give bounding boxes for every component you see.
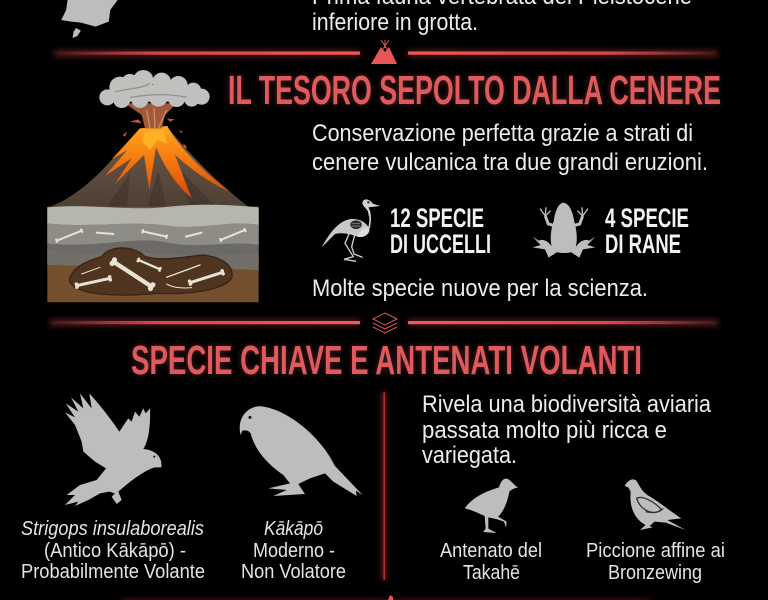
bone pocket <box>69 248 232 295</box>
pocket bones <box>77 260 223 288</box>
text: biodiversita: Rivela una biodiversità aviaria <box>422 391 711 418</box>
caption: piccione: Piccione affine ai <box>586 540 725 562</box>
strata <box>47 207 259 302</box>
icon: small volcano <box>371 40 397 64</box>
caption: kakapo: Kākāpō <box>264 518 323 540</box>
text: biodiversita <box>422 391 711 469</box>
text: biodiversita: variegata. <box>422 442 517 469</box>
lava flows <box>105 126 230 198</box>
icon: island map silhouette <box>61 0 118 38</box>
divider: layers <box>48 313 720 333</box>
stat: 12 specie di uccelli: 12 SPECIE <box>390 203 484 233</box>
text: nuove specie: Molte specie nuove per la scienza. <box>312 275 648 302</box>
vertical divider <box>381 392 387 580</box>
text: intro fauna: inferiore in grotta. <box>312 9 478 36</box>
caption: strigops: Strigops insulaborealis <box>21 518 204 540</box>
icon: pigeon <box>625 479 686 530</box>
icon: layers <box>373 313 397 333</box>
text: conservazione: Conservazione perfetta grazie a strati di <box>312 120 693 147</box>
stat: 4 specie di rane: 4 SPECIE <box>605 203 689 233</box>
caption: takahe <box>440 540 542 584</box>
caption: kakapo: Moderno - <box>253 540 335 562</box>
divider: volcano <box>54 40 718 64</box>
eruption column <box>125 103 177 128</box>
illustration: volcano with ash strata and bones <box>47 70 259 302</box>
ash cloud <box>99 70 210 108</box>
caption: piccione <box>586 540 725 584</box>
caption: strigops: Probabilmente Volante <box>21 561 205 583</box>
volcano cone <box>48 128 248 217</box>
caption: takahe: Takahē <box>463 562 520 584</box>
text: conservazione <box>312 120 708 176</box>
upper bones <box>57 230 245 241</box>
caption: piccione: Bronzewing <box>608 562 702 584</box>
caption: kakapo <box>241 518 346 583</box>
stat: 4 specie di rane <box>605 203 689 259</box>
caption: strigops <box>21 518 205 583</box>
icon: flying ancient kakapo <box>65 393 161 506</box>
divider: bottom edge <box>120 595 650 600</box>
icon: bird skeleton <box>322 199 380 261</box>
icon: frog <box>533 203 595 258</box>
text: intro fauna <box>312 0 692 36</box>
stat: 4 specie di rane: DI RANE <box>605 229 681 259</box>
text: conservazione: cenere vulcanica tra due grandi eruzioni. <box>312 149 708 176</box>
caption: takahe: Antenato del <box>440 540 542 562</box>
stat: 12 specie di uccelli: DI UCCELLI <box>390 229 491 259</box>
icon: modern kakapo <box>240 406 363 496</box>
stat: 12 specie di uccelli <box>390 203 491 259</box>
caption: kakapo: Non Volatore <box>241 561 346 583</box>
text: biodiversita: passata molto più ricca e <box>422 417 667 444</box>
caption: strigops: (Antico Kākāpō) - <box>44 540 186 562</box>
icon: takahe ancestor <box>465 479 518 533</box>
